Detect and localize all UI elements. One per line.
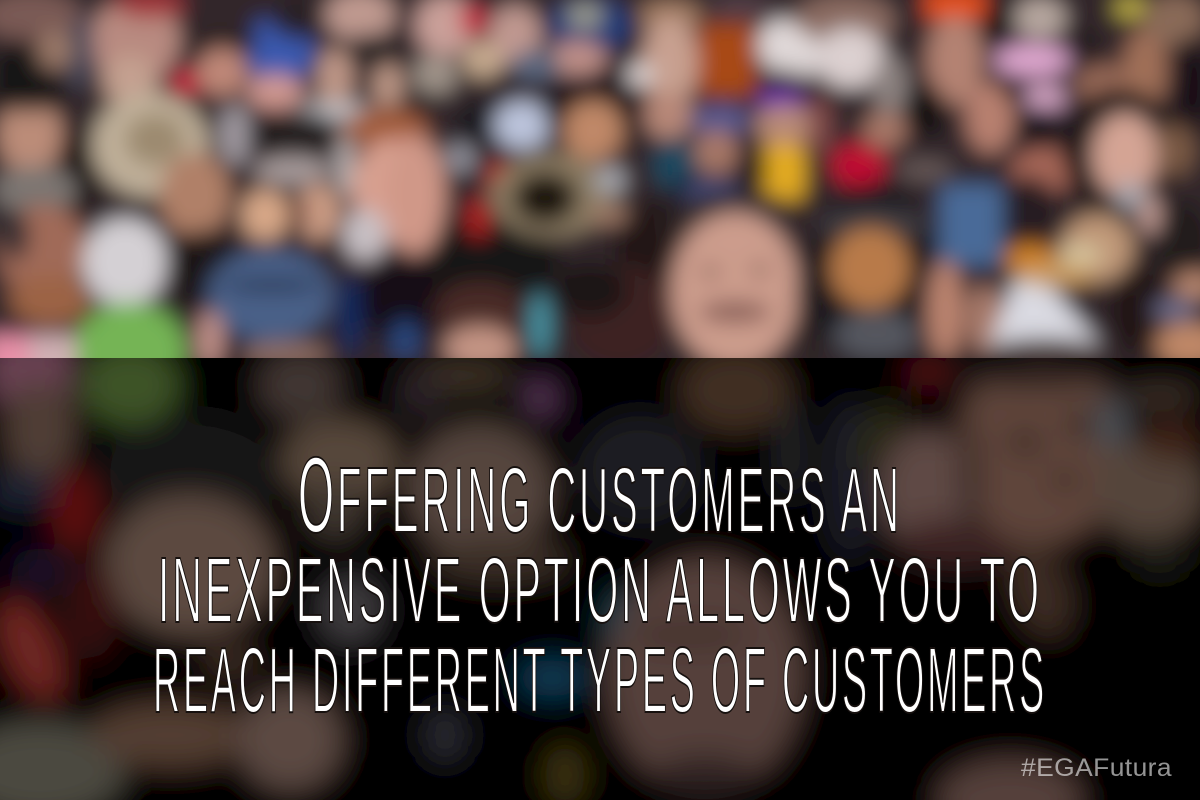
hashtag: #EGAFutura <box>1021 754 1172 782</box>
blurred crowd photo, upper bright part <box>0 0 1200 358</box>
headline <box>153 434 1047 732</box>
lower left of upper part <box>62 292 202 358</box>
darkened lower part of the photo with overlay band <box>0 330 1200 800</box>
hood <box>807 183 939 367</box>
central area <box>400 215 560 305</box>
